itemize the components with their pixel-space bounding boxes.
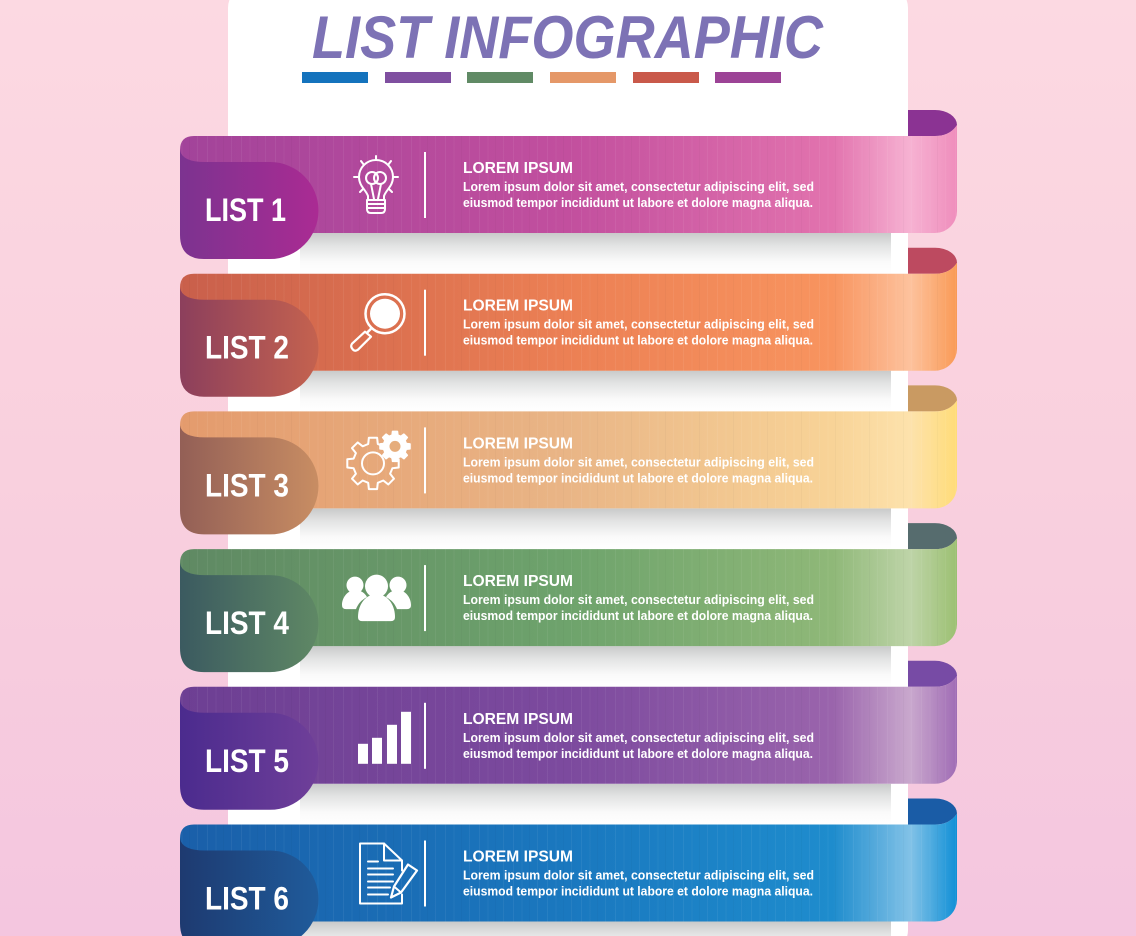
text block: eiusmod tempor incididunt ut labore et dolore magna aliqua. (463, 333, 813, 348)
icon: magnifier (351, 294, 404, 351)
text block: LOREM IPSUM (463, 848, 573, 866)
text block: LOREM IPSUM (463, 573, 573, 590)
panel: list 5 (180, 661, 957, 825)
label: list 1: LIST 1 (205, 192, 286, 228)
text block: eiusmod tempor incididunt ut labore et dolore magna aliqua. (463, 608, 813, 623)
text block: Lorem ipsum dolor sit amet, consectetur adipiscing elit, sed (463, 179, 814, 194)
text block: Lorem ipsum dolor sit amet, consectetur adipiscing elit, sed (463, 868, 814, 882)
text block: LOREM IPSUM (463, 160, 573, 177)
label: list 5: LIST 5 (205, 743, 289, 779)
text block: eiusmod tempor incididunt ut labore et dolore magna aliqua. (463, 195, 813, 210)
text block (463, 848, 814, 898)
icon: light bulb (354, 156, 398, 213)
text block: Lorem ipsum dolor sit amet, consectetur adipiscing elit, sed (463, 730, 814, 745)
title: LIST INFOGRAPHIC (312, 4, 824, 71)
label: list 3: LIST 3 (205, 467, 289, 503)
text block: LOREM IPSUM (463, 711, 573, 728)
icon: people (342, 575, 411, 621)
text block: Lorem ipsum dolor sit amet, consectetur adipiscing elit, sed (463, 454, 814, 469)
panel: list 3 (180, 385, 957, 549)
panel: list 2 (180, 248, 957, 412)
white center panel (228, 0, 908, 936)
text block (463, 573, 814, 623)
panel: list 1 (180, 110, 957, 274)
label: list 2: LIST 2 (205, 330, 289, 366)
icon: gears (347, 431, 410, 489)
text block: eiusmod tempor incididunt ut labore et dolore magna aliqua. (463, 884, 813, 898)
text block: eiusmod tempor incididunt ut labore et dolore magna aliqua. (463, 470, 813, 485)
text block: LOREM IPSUM (463, 298, 573, 315)
panel: list 4 (180, 523, 957, 687)
text block: Lorem ipsum dolor sit amet, consectetur adipiscing elit, sed (463, 317, 814, 332)
text block: eiusmod tempor incididunt ut labore et dolore magna aliqua. (463, 746, 813, 761)
text block: LOREM IPSUM (463, 435, 573, 452)
text block (463, 298, 814, 348)
icon: bar chart (358, 712, 411, 764)
text block (463, 435, 814, 485)
text block (463, 160, 814, 210)
text block: Lorem ipsum dolor sit amet, consectetur adipiscing elit, sed (463, 592, 814, 607)
icon: document with pencil (360, 844, 417, 904)
panel: list 6 (180, 798, 957, 936)
text block (463, 711, 814, 761)
label: list 6: LIST 6 (205, 880, 289, 916)
label: list 4: LIST 4 (205, 605, 289, 641)
color legend bars (302, 72, 781, 83)
